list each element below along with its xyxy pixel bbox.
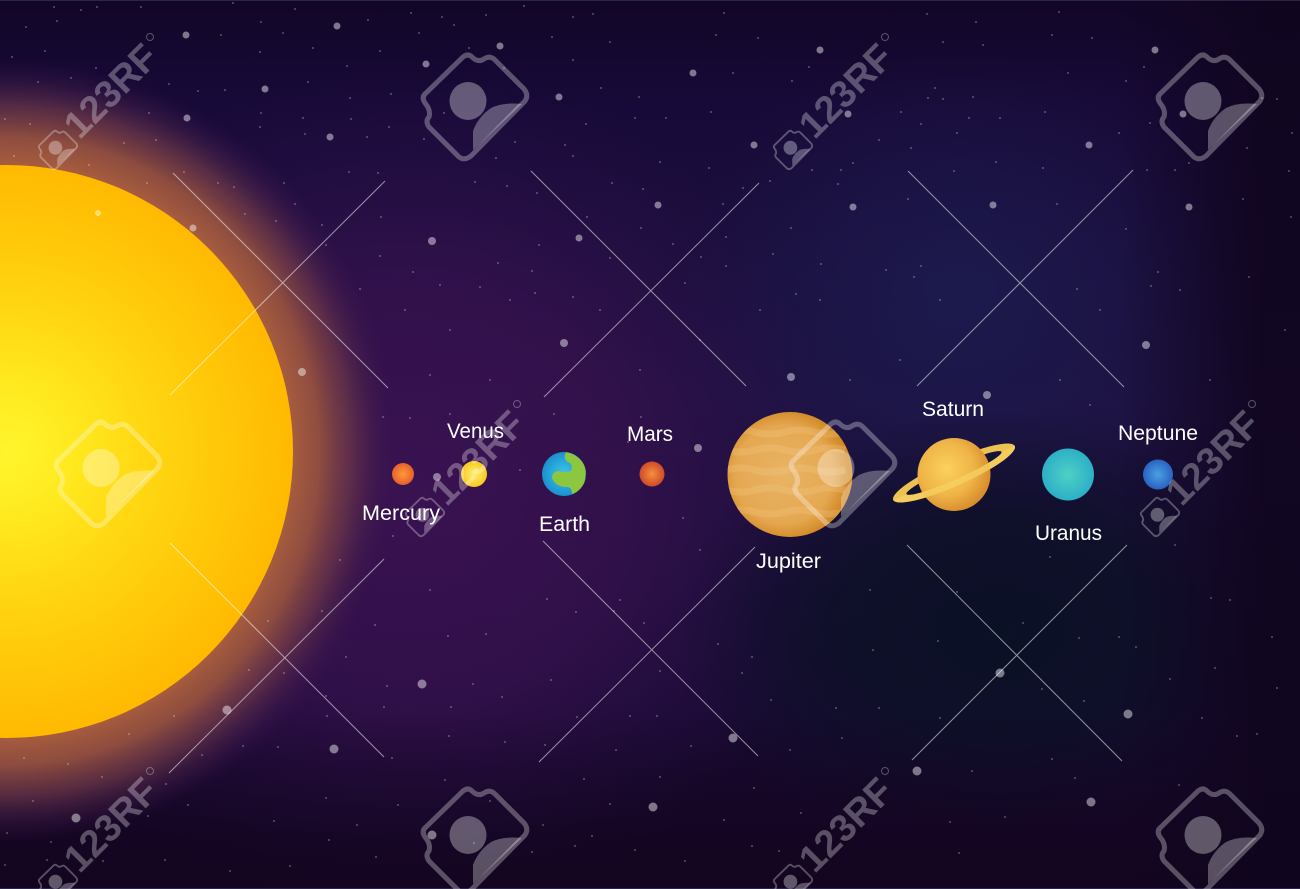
small stars, lower right [657, 592, 1277, 861]
small stars, middle band [340, 290, 1285, 600]
label: Neptune: Neptune [1118, 422, 1198, 445]
label: Mercury: Mercury [362, 502, 441, 525]
watermark: 123RF top middle: 123RF [791, 36, 902, 147]
label: Saturn: Saturn [922, 398, 984, 421]
planet: Neptune [1143, 460, 1173, 490]
large stars [72, 22, 1192, 840]
planet: Mercury [392, 463, 414, 485]
sun [0, 165, 293, 738]
watermark: 123RF centre: 123RF [423, 403, 534, 514]
planet: Saturn [888, 434, 1020, 512]
planet: Uranus [1042, 448, 1094, 500]
watermark: 123RF bottom left: 123RF [56, 770, 167, 881]
label: Venus: Venus [447, 420, 504, 443]
small stars, lower left [5, 599, 644, 871]
label: Uranus: Uranus [1035, 522, 1102, 545]
sun glow [0, 59, 398, 843]
planet: Venus [461, 461, 487, 487]
planet: Mars [640, 462, 664, 486]
watermark: 123RF bottom middle: 123RF [791, 770, 902, 881]
planet: Earth [542, 452, 586, 496]
small stars, upper right [660, 12, 1292, 294]
label: Earth: Earth [539, 513, 590, 536]
small stars [5, 3, 643, 297]
planet: Jupiter [725, 412, 852, 537]
watermark: 123RF top left: 123RF [56, 36, 167, 147]
label: Mars: Mars [627, 423, 673, 446]
watermark crosshair lines [169, 170, 1133, 773]
watermark: 123RF right: 123RF [1158, 403, 1269, 514]
label: Jupiter: Jupiter [756, 550, 821, 573]
